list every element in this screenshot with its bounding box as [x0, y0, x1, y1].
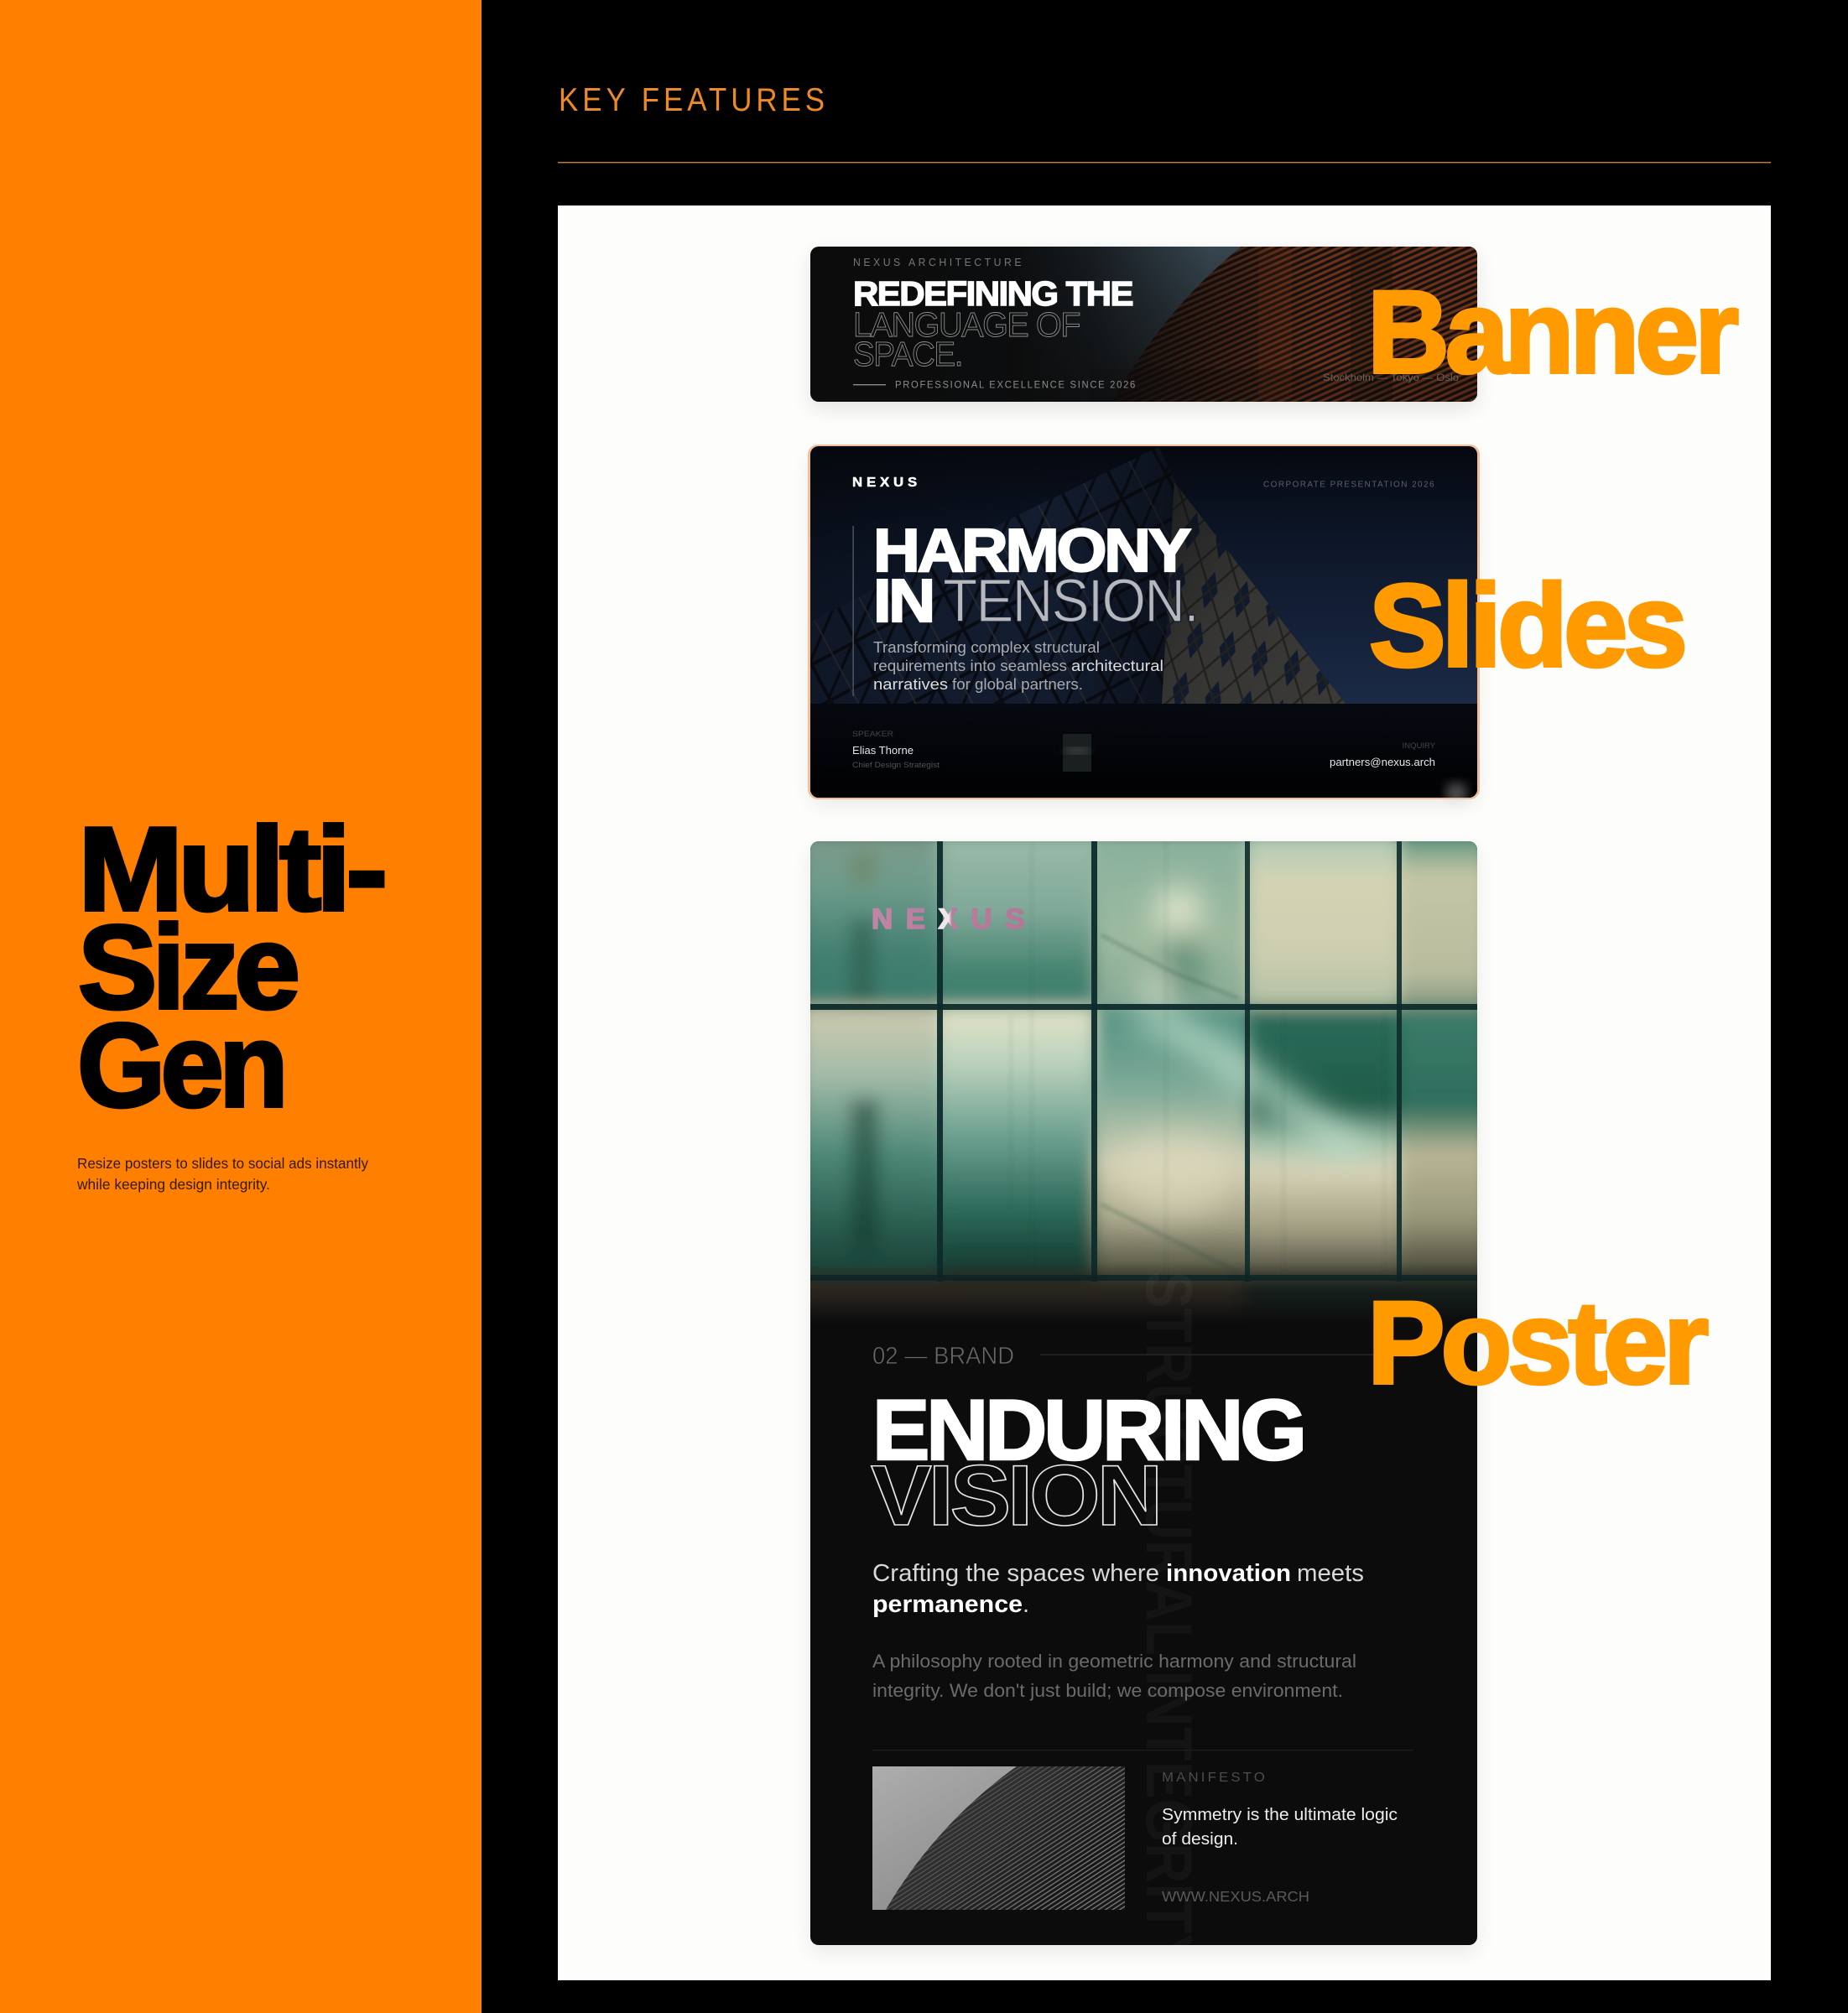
poster photo: glass facade [810, 841, 1477, 1313]
label: Banner: Banner [1367, 266, 1737, 398]
poster statement: Crafting the spaces where [872, 1560, 1159, 1587]
poster headline [871, 1398, 1303, 1527]
poster statement: innovation [1166, 1560, 1291, 1587]
banner eyebrow: NEXUS ARCHITECTURE [853, 257, 1024, 268]
slide speaker block [852, 730, 940, 770]
slide meta: CORPORATE PRESENTATION 2026 [1263, 480, 1435, 490]
slide vertical rule [852, 526, 854, 696]
slide body copy: Transforming complex structural [873, 639, 1100, 656]
card: banner [810, 245, 1478, 403]
slide body copy: narratives [873, 676, 948, 693]
slide logo: NEXUS [852, 476, 921, 490]
description: Resize posters to slides to social ads instantly [77, 1155, 368, 1172]
title: Multi-Size Gen [77, 803, 383, 1132]
slide thumbnail [1063, 734, 1091, 772]
poster thumbnail image [872, 1766, 1125, 1910]
slide body copy: for global partners. [952, 676, 1083, 693]
card: slides [808, 445, 1480, 804]
slide speaker block: Chief Design Strategist [852, 761, 940, 770]
poster photo: dark fade [810, 1270, 1477, 1322]
poster paragraph: integrity. We don't just build; we compose environment. [872, 1680, 1343, 1701]
heading: key features: KEY FEATURES [559, 82, 829, 118]
poster photo: window mullions [810, 841, 1477, 1282]
poster statement: . [1023, 1591, 1029, 1618]
banner headline: SPACE. [853, 335, 962, 373]
slide headline: HARMONY [873, 518, 1190, 585]
poster paragraph: A philosophy rooted in geometric harmony and structural [872, 1651, 1356, 1672]
title: Multi-Size Gen: Gen [77, 999, 284, 1132]
poster manifesto block [1162, 1771, 1398, 1905]
panel: white showcase [558, 205, 1771, 1980]
slide body copy [873, 639, 1163, 693]
poster manifesto block: Symmetry is the ultimate logic [1162, 1805, 1398, 1824]
label: Slides: Slides [1369, 559, 1684, 691]
poster manifesto block: WWW.NEXUS.ARCH [1162, 1888, 1309, 1905]
poster headline: ENDURING [872, 1382, 1304, 1478]
description: while keeping design integrity. [76, 1176, 270, 1193]
slide inquiry block: INQUIRY [1403, 741, 1436, 751]
slide speaker block: SPEAKER [852, 730, 894, 738]
title: Multi-Size Gen: Size [78, 901, 297, 1034]
slide body copy: architectural [1071, 658, 1163, 674]
header rule [558, 162, 1771, 163]
poster statement: meets [1297, 1560, 1364, 1587]
card: poster [797, 830, 1493, 1971]
slide inquiry block: partners@nexus.arch [1330, 756, 1435, 768]
slide building facade [1162, 482, 1346, 704]
banner cities: Stockholm — Tokyo — Oslo [1323, 372, 1459, 383]
poster headline: VISION [871, 1448, 1159, 1543]
slide body copy: requirements into seamless [873, 658, 1067, 674]
banner headline: LANGUAGE OF [853, 305, 1080, 344]
banner tagline: PROFESSIONAL EXCELLENCE SINCE 2026 [895, 379, 1137, 391]
banner headline [854, 280, 1133, 367]
poster paragraph [872, 1651, 1356, 1701]
slide headline: TENSION. [943, 568, 1198, 635]
poster photo: fine details [1010, 934, 1385, 1272]
poster manifesto block: of design. [1162, 1829, 1238, 1849]
poster section label: 02 — BRAND [872, 1343, 1014, 1370]
slide headline: IN [873, 568, 933, 635]
slide truss structure [810, 447, 1176, 704]
description [76, 1155, 368, 1193]
banner building photo [1091, 245, 1478, 403]
poster logo: NEXUS [872, 903, 1038, 935]
poster manifesto block: MANIFESTO [1162, 1771, 1268, 1785]
banner headline: REDEFINING THE [853, 274, 1132, 313]
slide scroll smudge [1446, 783, 1466, 804]
poster statement [872, 1560, 1364, 1618]
panel: orange sidebar [0, 0, 482, 2013]
slide speaker block: Elias Thorne [852, 744, 914, 757]
slide inquiry block [1330, 741, 1436, 768]
label: Poster: Poster [1367, 1277, 1707, 1408]
poster statement: permanence [872, 1591, 1023, 1618]
slide footer band [810, 704, 1477, 798]
title: Multi-Size Gen: Multi- [78, 803, 383, 936]
slide headline [876, 528, 1195, 622]
